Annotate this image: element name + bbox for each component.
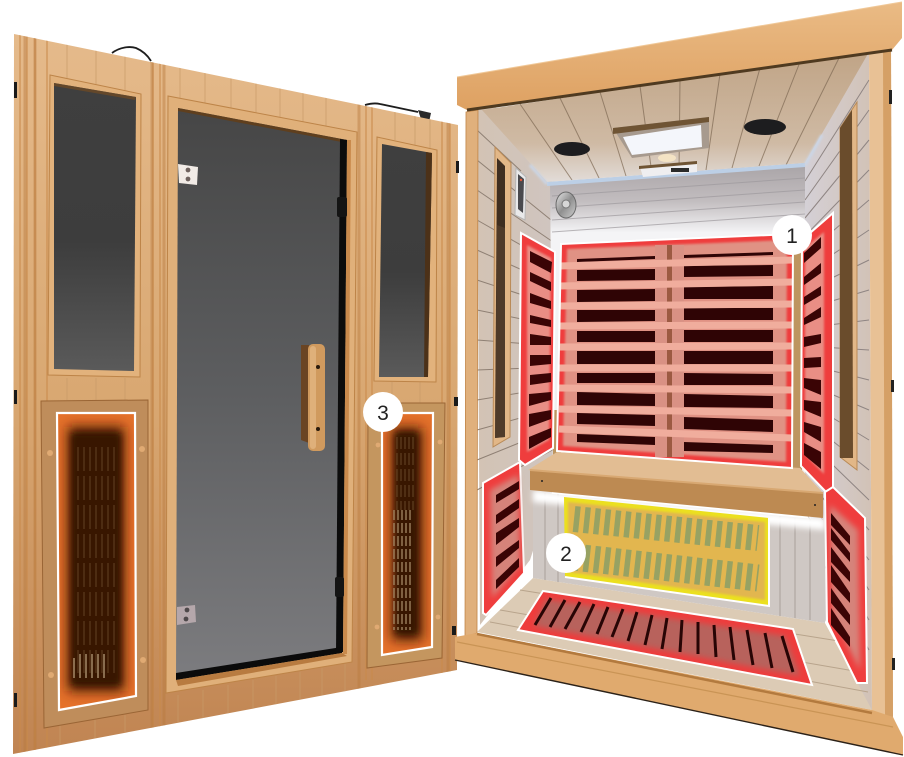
- heater slots: [577, 252, 773, 453]
- marker 1: 1: [786, 225, 798, 248]
- icon: ceiling vent unit: [639, 161, 697, 177]
- left wall: [477, 106, 556, 625]
- panel: right lower heater frame: [367, 403, 445, 668]
- under-bench light strip: [533, 490, 825, 530]
- icon: door handle: [301, 344, 325, 451]
- marker 3: [363, 392, 403, 432]
- ceiling: [482, 52, 869, 184]
- back wall: [550, 163, 805, 480]
- sauna cabin: [455, 2, 903, 755]
- top cap: [457, 2, 902, 110]
- icon: wall lamp: [556, 192, 576, 218]
- door assembly: [13, 30, 459, 757]
- heater center stile: [655, 245, 684, 457]
- floor slits: [535, 598, 793, 672]
- panel: main rear heater: [557, 234, 793, 468]
- panel: yellow under-bench heater: [564, 497, 769, 606]
- marker 3: 3: [377, 402, 389, 425]
- icon: lower glass hinge plate: [177, 605, 196, 625]
- panel: left door heater highlight: [57, 413, 136, 710]
- heater grille: [574, 519, 758, 578]
- marker 2: [546, 533, 586, 573]
- panel: right upper window: [374, 137, 437, 382]
- base: [455, 633, 903, 755]
- heater slats: [559, 260, 792, 438]
- panel: left side heater upper: [519, 233, 555, 465]
- icon: reading light: [658, 154, 676, 162]
- gap behind main heater: [553, 250, 802, 470]
- left wall plank lines: [477, 130, 556, 490]
- back wall plank lines: [552, 178, 805, 232]
- icon: left ceiling speaker: [554, 142, 590, 156]
- door plank grooves: [20, 30, 450, 757]
- side slots: [529, 251, 552, 449]
- right wall plank lines: [805, 80, 869, 650]
- marker 1: [772, 215, 812, 255]
- right wall window: [840, 102, 857, 470]
- icon: upper glass hinge plate: [178, 164, 198, 185]
- panel: left side heater lower: [483, 462, 524, 615]
- panel: right side heater upper: [801, 213, 833, 492]
- right door post: [869, 47, 895, 717]
- icon: control panel: [515, 168, 526, 220]
- door wooden body: [13, 34, 458, 754]
- icon: cables on top of door: [112, 47, 431, 122]
- icon: ceiling light: [613, 117, 709, 158]
- icon: right ceiling speaker: [744, 119, 786, 135]
- lower side slots: [496, 481, 519, 589]
- panel: bench: [528, 452, 823, 518]
- panel: right door heater highlight: [382, 413, 433, 655]
- floor: [477, 578, 872, 710]
- panel: center glass door: [166, 96, 357, 693]
- panel: left lower heater frame: [41, 400, 148, 728]
- panel: left upper window: [48, 75, 141, 377]
- right wall: [805, 50, 872, 712]
- panel: floor heater: [518, 591, 812, 685]
- left wall window: [493, 147, 511, 447]
- lower right slots: [831, 513, 850, 647]
- icon: door edge hinges: [14, 82, 459, 707]
- lower back wall: [533, 490, 825, 623]
- right side slots: [804, 237, 821, 469]
- icon: black door hinges: [335, 197, 347, 597]
- panel: right side heater lower: [825, 487, 867, 683]
- ceiling plank lines: [520, 56, 840, 180]
- left door post: [465, 110, 478, 637]
- marker 2: 2: [560, 543, 572, 566]
